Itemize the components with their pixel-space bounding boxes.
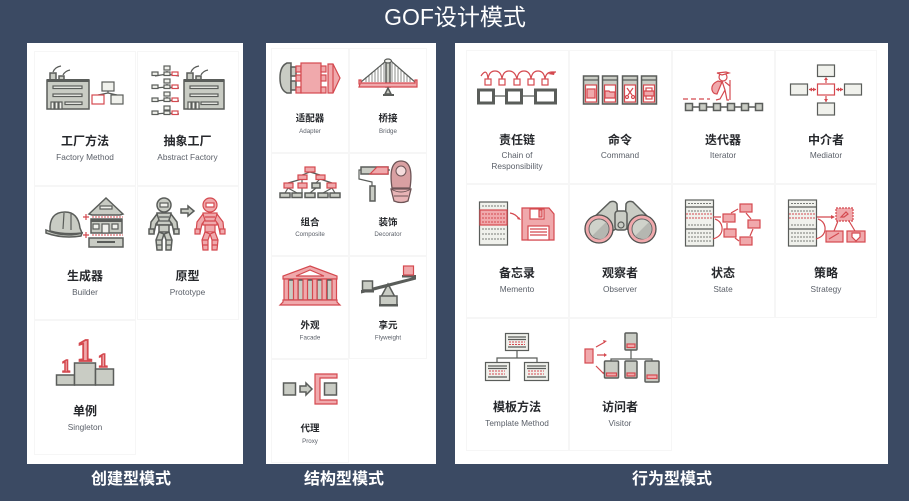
label: proxy: 代理 — [300, 424, 320, 434]
label: template method — [485, 399, 549, 428]
card: iterator — [672, 50, 774, 184]
icon: monitor templates — [486, 334, 548, 380]
label: singleton: 单例 — [73, 403, 97, 418]
card: builder — [34, 186, 136, 320]
icon: proxy bracket — [284, 374, 337, 404]
label: singleton: Singleton — [68, 422, 103, 432]
label: prototype: 原型 — [175, 269, 200, 283]
icon: podium with ones: 1 — [62, 356, 70, 376]
label: command: Command — [601, 150, 640, 160]
card: command — [570, 50, 672, 184]
label: proxy — [300, 424, 320, 445]
label: facade: Facade — [300, 334, 321, 342]
icon: hiker on chain — [683, 72, 762, 110]
heading: creational patterns: 创建型模式 — [91, 470, 171, 488]
icon: podium with ones: 1 — [77, 332, 93, 368]
icon: suspension bridge — [359, 59, 417, 96]
label: adapter: 适配器 — [296, 112, 325, 124]
label: chain of responsibility: 责任链 — [499, 132, 535, 147]
label: facade — [300, 320, 321, 342]
label: builder: Builder — [72, 287, 98, 297]
label: builder — [67, 268, 103, 297]
panel: behavioral patterns — [455, 43, 888, 464]
icon: chain links — [478, 71, 556, 103]
icon: visitor and servers — [585, 333, 659, 382]
label: memento: 备忘录 — [499, 265, 535, 280]
label: composite — [295, 216, 325, 238]
label: abstract factory — [157, 133, 219, 162]
label: observer: Observer — [603, 284, 637, 294]
card: factory method — [34, 52, 136, 186]
card: visitor — [570, 318, 672, 450]
label: chain of responsibility: Chain of — [502, 150, 533, 160]
icon: podium with ones — [56, 332, 114, 385]
label: visitor: Visitor — [609, 418, 632, 428]
card: prototype — [138, 186, 238, 320]
icon: robot prototype — [149, 198, 225, 250]
card: facade — [272, 256, 348, 358]
label: iterator — [705, 132, 741, 160]
label: factory method — [56, 133, 114, 162]
label: template method: Template Method — [485, 418, 549, 428]
label: flyweight: 享元 — [378, 320, 398, 332]
card: chain of responsibility — [466, 50, 568, 184]
card: decorator — [350, 154, 426, 256]
card: observer — [570, 184, 672, 318]
label: flyweight: Flyweight — [375, 334, 401, 342]
label: command: 命令 — [608, 132, 632, 147]
label: mediator: Mediator — [810, 150, 842, 160]
label: strategy: Strategy — [811, 284, 842, 294]
icon: document and floppy — [480, 202, 554, 245]
label: memento: Memento — [500, 284, 535, 294]
card: mediator — [776, 50, 876, 184]
label: command — [601, 132, 640, 160]
label: singleton — [68, 403, 103, 432]
label: strategy — [811, 265, 842, 294]
card: bridge — [350, 48, 426, 152]
icon: mediator boxes — [790, 65, 862, 115]
icon: composite tree — [280, 167, 340, 198]
label: decorator: 装饰 — [378, 216, 398, 228]
label: state — [711, 265, 735, 294]
icon: command cards — [583, 76, 656, 104]
label: observer: 观察者 — [602, 265, 638, 280]
icon: helmet and house — [46, 198, 123, 247]
icon: factory with class tree — [47, 66, 123, 109]
label: bridge: Bridge — [379, 128, 397, 135]
heading: behavioral patterns: 行为型模式 — [632, 470, 712, 488]
label: state: State — [713, 284, 733, 294]
label: abstract factory: Abstract Factory — [157, 152, 219, 162]
label: decorator: Decorator — [374, 231, 402, 238]
icon: state machine — [685, 200, 760, 246]
card: proxy — [272, 360, 348, 462]
label: prototype — [170, 269, 206, 297]
icon: podium with ones: 1 — [98, 350, 108, 372]
label: chain of responsibility — [491, 132, 543, 171]
card: strategy — [776, 184, 876, 318]
label: strategy: 策略 — [814, 265, 838, 280]
label: decorator — [374, 216, 402, 238]
label: adapter: Adapter — [299, 128, 321, 135]
label: factory method: Factory Method — [56, 152, 114, 162]
card: state — [672, 184, 774, 318]
icon: strategy — [788, 200, 865, 246]
card: singleton — [34, 320, 136, 454]
label: prototype: Prototype — [170, 287, 206, 297]
icon: binoculars — [585, 201, 656, 243]
label: abstract factory: 抽象工厂 — [163, 133, 212, 148]
card: adapter — [272, 48, 348, 152]
label: flyweight — [375, 320, 401, 342]
label: facade: 外观 — [300, 320, 320, 332]
label: iterator: 迭代器 — [705, 132, 741, 147]
label: factory method: 工厂方法 — [61, 133, 109, 148]
label: state: 状态 — [711, 265, 735, 280]
label: mediator: 中介者 — [808, 132, 844, 147]
card: abstract factory — [138, 52, 238, 186]
label: visitor: 访问者 — [602, 399, 638, 414]
card: memento — [466, 184, 568, 318]
label: visitor — [602, 399, 638, 428]
heading: structural patterns: 结构型模式 — [304, 470, 384, 488]
icon: classical facade — [280, 266, 340, 305]
label: memento — [499, 265, 535, 294]
card: composite — [272, 154, 348, 256]
label: builder: 生成器 — [67, 268, 103, 283]
title: GOF设计模式 — [384, 4, 526, 30]
label: adapter — [296, 112, 325, 135]
label: proxy: Proxy — [302, 438, 319, 445]
label: iterator: Iterator — [710, 150, 736, 160]
icon: paint roller and matryoshka — [359, 161, 411, 202]
label: mediator — [808, 132, 844, 160]
label: bridge — [378, 112, 398, 135]
card: flyweight — [350, 256, 426, 358]
icon: abstract factory — [152, 66, 224, 114]
label: composite: Composite — [295, 231, 325, 238]
label: template method: 模板方法 — [493, 399, 541, 414]
card: template method — [466, 318, 568, 450]
panel: structural patterns — [266, 43, 436, 464]
label: observer — [602, 265, 638, 294]
label: composite: 组合 — [300, 216, 320, 228]
icon: seesaw balance — [361, 266, 416, 306]
icon: adapter plug — [280, 63, 340, 93]
label: bridge: 桥接 — [378, 112, 398, 124]
label: chain of responsibility: Responsibility — [491, 161, 543, 171]
panel: creational patterns — [27, 43, 243, 464]
